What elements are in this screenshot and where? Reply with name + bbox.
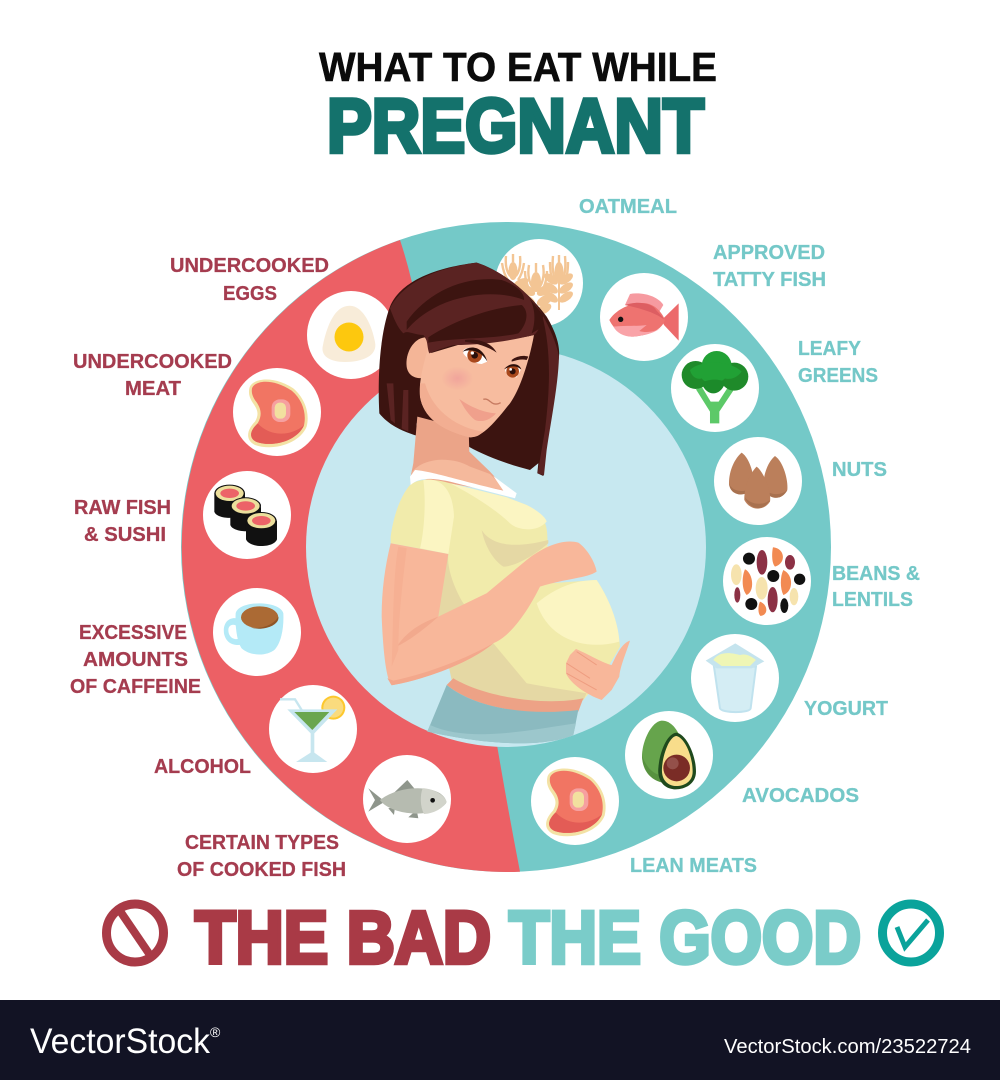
icon: check	[882, 904, 940, 962]
illustration: pregnant woman	[379, 263, 630, 743]
label: raw fish and sushi: RAW FISH	[74, 496, 171, 519]
label: caffeine: EXCESSIVE	[79, 621, 187, 644]
label: oatmeal: OATMEAL	[579, 195, 677, 218]
label: nuts: NUTS	[832, 458, 887, 481]
label: cooked fish	[177, 831, 346, 881]
label: undercooked eggs: UNDERCOOKED	[170, 254, 329, 277]
eyes	[463, 340, 528, 378]
label: fatty fish: TATTY FISH	[713, 268, 826, 291]
label: undercooked meat	[73, 350, 232, 400]
good ring	[181, 222, 831, 872]
icon: egg	[307, 291, 395, 379]
labels: the good	[579, 195, 920, 877]
label: raw fish and sushi: & SUSHI	[84, 523, 166, 546]
label: caffeine: OF CAFFEINE	[70, 675, 201, 698]
footer watermark bar	[0, 1000, 1000, 1080]
label: raw fish and sushi	[74, 496, 171, 546]
bad ring segment	[182, 240, 520, 872]
icon: pink fish	[600, 273, 688, 361]
title line 1: WHAT TO EAT WHILE	[319, 44, 717, 90]
label: fatty fish: APPROVED	[713, 241, 825, 264]
icon: broccoli	[671, 344, 759, 432]
inner circle	[306, 347, 706, 747]
label: lean meats: LEAN MEATS	[630, 854, 757, 877]
label: fatty fish	[713, 241, 826, 291]
icon: undercooked meat	[233, 368, 321, 456]
label: caffeine	[70, 621, 201, 698]
icon: prohibited	[106, 904, 164, 962]
label: avocados: AVOCADOS	[742, 784, 859, 807]
icon: yogurt	[691, 634, 779, 722]
label: undercooked meat: UNDERCOOKED	[73, 350, 232, 373]
registered mark: ®	[210, 1024, 221, 1040]
image id: VectorStock.com/23522724	[724, 1036, 971, 1058]
legend	[106, 896, 940, 979]
icon: cooked fish	[363, 755, 451, 843]
icon: coffee cup	[213, 588, 301, 676]
label: undercooked eggs	[170, 254, 329, 305]
icon: avocado	[625, 711, 713, 799]
icon: lean meat	[531, 757, 619, 845]
label: beans and lentils: LENTILS	[832, 588, 913, 611]
label: leafy greens: LEAFY	[798, 337, 861, 360]
nose and mouth	[459, 399, 501, 421]
label: undercooked eggs: EGGS	[223, 282, 277, 305]
label: beans and lentils: BEANS &	[832, 562, 920, 585]
arms and hands	[382, 541, 630, 700]
labels: the bad	[70, 254, 346, 881]
label: leafy greens: GREENS	[798, 364, 878, 387]
shirt	[391, 470, 620, 706]
belly skin and trousers	[427, 678, 583, 743]
label: alcohol: ALCOHOL	[154, 755, 251, 778]
logo text: VectorStock	[30, 1022, 210, 1061]
label: caffeine: AMOUNTS	[83, 648, 188, 671]
title line 2: PREGNANT	[327, 84, 704, 169]
label: cooked fish: OF COOKED FISH	[177, 858, 346, 881]
heading: the good: THE GOOD	[509, 896, 861, 979]
icon: cocktail	[269, 685, 357, 773]
label: cooked fish: CERTAIN TYPES	[185, 831, 339, 854]
icon: sushi	[203, 471, 291, 559]
label: leafy greens	[798, 337, 878, 387]
icon: beans	[723, 537, 811, 625]
title	[319, 44, 717, 169]
icon: oatmeal wheat	[495, 239, 583, 327]
label: yogurt: YOGURT	[804, 697, 888, 720]
heading: the bad: THE BAD	[195, 896, 491, 979]
label: beans and lentils	[832, 562, 920, 611]
icon: nuts	[714, 437, 802, 525]
label: undercooked meat: MEAT	[125, 377, 181, 400]
panel: circle diagram	[181, 222, 831, 872]
